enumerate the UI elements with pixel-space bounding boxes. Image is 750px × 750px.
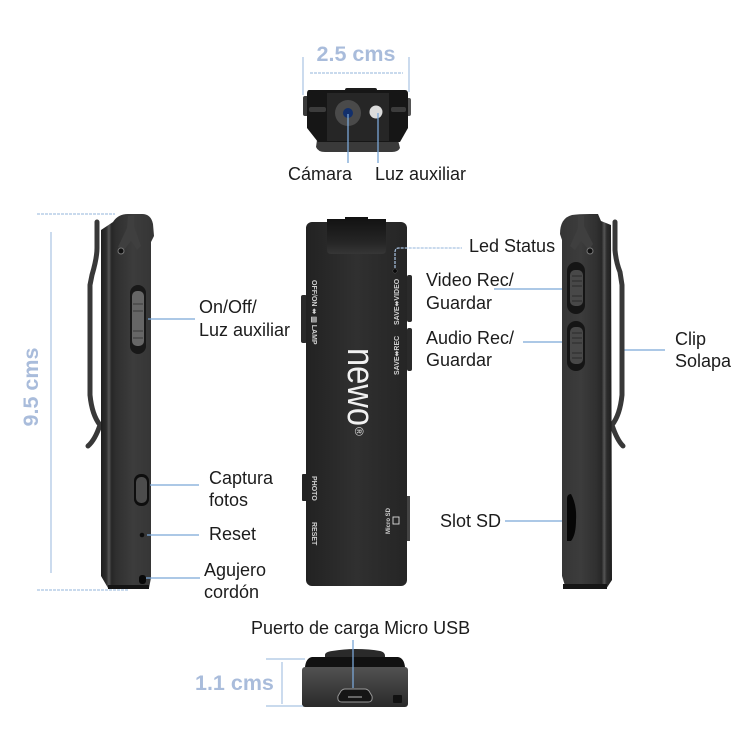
- logo: newo: newo: [339, 348, 381, 426]
- label: Clip Solapa: Clip: [675, 329, 706, 349]
- clip: [612, 222, 623, 446]
- label: Clip Solapa: Solapa: [675, 351, 732, 371]
- device: right side view: [560, 214, 623, 589]
- device: front view: [301, 217, 412, 586]
- label: Captura fotos: [150, 468, 274, 510]
- label: Puerto de carga: Puerto de carga Micro USB: [251, 618, 470, 638]
- button: photo: [134, 474, 149, 506]
- printed labels: RESET: [310, 522, 317, 546]
- printed labels: SAVE⬌VIDEO: [394, 278, 401, 325]
- dimension: depth 1.1 cms: [195, 659, 305, 706]
- printed labels: PHOTO: [310, 476, 317, 501]
- label: Reset: Reset: [209, 524, 256, 544]
- dimension: height 9.5 cms: [19, 214, 128, 590]
- button: audio: [567, 321, 585, 371]
- label: Audio Rec: Guardar: [426, 350, 492, 370]
- label: Captura fotos: fotos: [209, 490, 248, 510]
- label: Clip Solapa: [623, 329, 732, 371]
- button: on/off: [130, 285, 146, 354]
- label: Cámara: Cámara: [288, 164, 353, 184]
- label: Video Rec: [426, 270, 567, 313]
- device: left side view: [88, 214, 154, 589]
- clip: [88, 222, 100, 446]
- icon: camera lens: [335, 100, 361, 126]
- label: Agujero cordón: cordón: [204, 582, 259, 602]
- label: Video Rec: Video Rec/: [426, 270, 514, 290]
- led status: [393, 269, 397, 273]
- label: Video Rec: Guardar: [426, 293, 492, 313]
- dimension: depth 1.1 cms: 1.1 cms: [195, 671, 274, 695]
- dimension: height 9.5 cms: 9.5 cms: [19, 348, 43, 426]
- label: Luz auxiliar: Luz auxiliar: [375, 164, 466, 184]
- icon: auxiliary light: [370, 106, 382, 118]
- label: On/Off: On/Off/: [199, 297, 257, 317]
- device: bottom view: [302, 649, 408, 707]
- cord hole: [139, 575, 146, 584]
- printed labels: [310, 278, 401, 546]
- label: Led Status: Led Status: [469, 236, 555, 256]
- label: On/Off: Luz auxiliar: [199, 320, 290, 340]
- label: Led Status: [395, 236, 555, 268]
- label: Agujero cordón: [146, 560, 266, 602]
- label: On/Off: [148, 297, 290, 340]
- device: top view: [303, 88, 411, 152]
- button: video: [567, 262, 585, 314]
- camera flap: [327, 217, 386, 254]
- printed labels: SAVE⬌REC: [394, 336, 401, 375]
- label: Luz auxiliar: [375, 113, 466, 184]
- label: Audio Rec: Audio Rec/: [426, 328, 514, 348]
- logo: newo: ®: [352, 427, 366, 436]
- label: Audio Rec: [426, 328, 567, 370]
- label: Slot SD: Slot SD: [440, 511, 501, 531]
- label: Reset: [147, 524, 256, 544]
- reset hole: [140, 533, 144, 537]
- printed labels: Micro SD: [386, 507, 392, 534]
- label: Agujero cordón: Agujero: [204, 560, 266, 580]
- label: Captura fotos: Captura: [209, 468, 274, 488]
- label: Slot SD: [440, 511, 566, 531]
- micro usb port: [338, 689, 372, 702]
- label: Cámara: [288, 114, 353, 184]
- printed labels: OFF/ON ⬌ ▥ LAMP: [310, 280, 317, 345]
- dimension: width 2.5 cms: [303, 42, 409, 95]
- dimension: width 2.5 cms: 2.5 cms: [317, 42, 395, 66]
- sd slot: [567, 494, 576, 541]
